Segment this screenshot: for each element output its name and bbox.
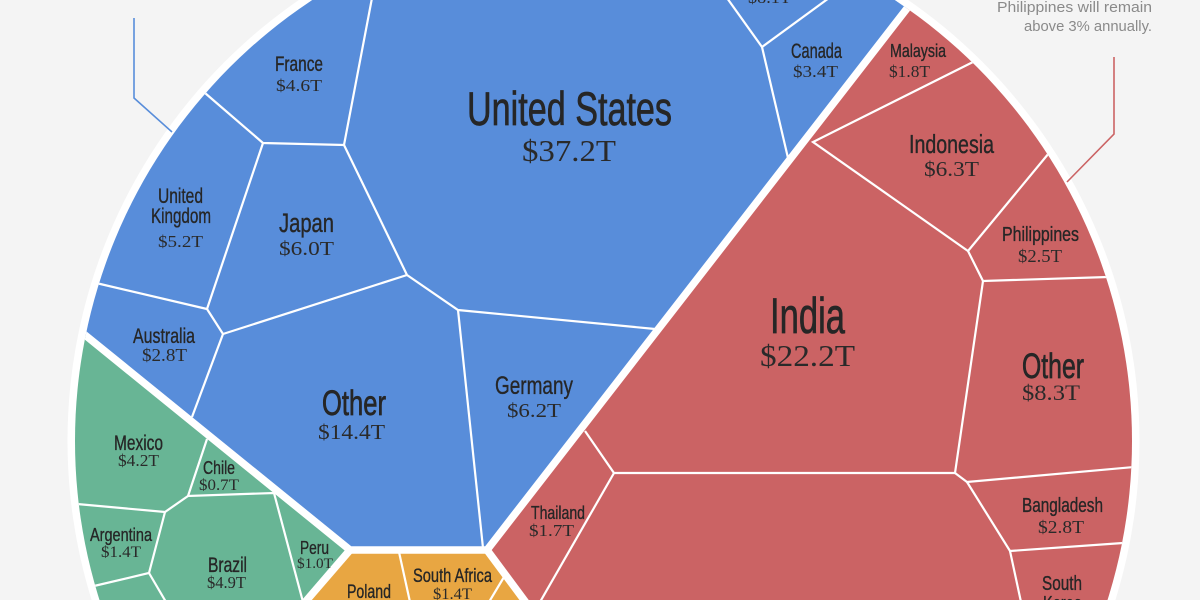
label: Japan: Japan — [279, 208, 334, 238]
label: Chile: Chile — [203, 458, 235, 478]
cell borders: asia — [540, 61, 1134, 600]
label: Peru — [297, 538, 333, 572]
label: Other advanced: Other — [322, 384, 386, 423]
label: Argentina — [90, 524, 153, 561]
label: Brazil: Brazil — [208, 554, 247, 577]
cell borders: latin america — [77, 439, 303, 600]
label: Thailand: $1.7T — [529, 521, 575, 540]
label: Other asia — [1022, 347, 1084, 405]
label: Mexico — [114, 432, 163, 470]
label: Canada: $3.4T — [793, 62, 839, 81]
label: Peru: $1.0T — [297, 556, 333, 572]
label: Indonesia: Indonesia — [909, 129, 994, 159]
region: asia — [492, 8, 1132, 600]
label: Argentina: $1.4T — [101, 544, 141, 561]
label: Other asia: $8.3T — [1022, 380, 1081, 405]
label: Argentina: Argentina — [90, 524, 153, 545]
label: Thailand: Thailand — [531, 503, 585, 523]
label: Other advanced: $14.4T — [318, 420, 385, 444]
label: Japan — [279, 208, 335, 260]
label: India — [760, 288, 855, 373]
label: France: $4.6T — [276, 76, 323, 95]
callout text: growth note: Philippines will remain — [997, 0, 1152, 16]
label: United States: $37.2T — [522, 133, 616, 168]
label: Germany — [495, 372, 573, 422]
label: Chile — [199, 458, 239, 494]
callout text: growth note: above 3% annually. — [1024, 19, 1152, 35]
label: India: India — [770, 288, 845, 344]
label: Chile: $0.7T — [199, 477, 239, 494]
region separators — [85, 6, 910, 600]
label: Brazil — [207, 554, 247, 592]
label: Germany: Germany — [495, 372, 573, 400]
label: South Korea — [1042, 573, 1083, 600]
label: United Kingdom: United — [158, 185, 203, 208]
label: Canada: Canada — [791, 40, 842, 63]
label: Mexico: Mexico — [114, 432, 163, 455]
label: Philippines: $2.5T — [1018, 246, 1062, 266]
label: India: $22.2T — [760, 339, 855, 373]
region: emerging europe and africa — [312, 554, 520, 600]
label: Japan: $6.0T — [279, 238, 335, 260]
label: Philippines — [1002, 224, 1079, 266]
callout arrow: red leader line — [1067, 57, 1114, 182]
label: Thailand — [529, 503, 585, 540]
label: United Kingdom: $5.2T — [158, 232, 204, 251]
label: Malaysia — [889, 41, 947, 81]
label: Mexico: $4.2T — [118, 451, 159, 470]
label: Australia: Australia — [133, 325, 195, 348]
label: United Kingdom — [151, 185, 211, 251]
label: Malaysia: $1.8T — [889, 62, 930, 81]
label: Other advanced — [318, 384, 386, 444]
label: United States: United States — [467, 82, 672, 135]
label: Bangladesh: Bangladesh — [1022, 495, 1103, 517]
label: United Kingdom: Kingdom — [151, 205, 211, 228]
label: Indonesia — [909, 129, 994, 181]
label: Philippines: Philippines — [1002, 224, 1079, 246]
label: South Africa: South Africa — [413, 565, 492, 587]
label: South Africa — [413, 565, 492, 600]
label: Australia: $2.8T — [142, 345, 187, 365]
label: Other asia: Other — [1022, 347, 1084, 386]
cell borders: advanced economies — [96, 0, 829, 548]
label: Brazil: $4.9T — [207, 573, 246, 592]
label: France — [275, 53, 323, 95]
label: Canada — [791, 40, 842, 81]
cell borders: emerging europe and africa — [399, 552, 504, 600]
label: Bangladesh: $2.8T — [1038, 517, 1084, 537]
label: Peru: Peru — [300, 538, 329, 558]
callout text: growth note — [997, 0, 1152, 35]
region: advanced economies — [86, 0, 907, 546]
label: Indonesia: $6.3T — [924, 157, 979, 181]
label: France: France — [275, 53, 323, 76]
label: United States — [467, 82, 672, 168]
label: Germany: $6.2T — [507, 400, 562, 422]
region: latin america — [75, 336, 344, 600]
label: Australia — [133, 325, 195, 365]
label: Bangladesh — [1022, 495, 1103, 537]
label: Malaysia: Malaysia — [890, 41, 947, 61]
label: South Korea: South — [1042, 573, 1082, 595]
callout arrow: blue leader line — [134, 18, 172, 132]
